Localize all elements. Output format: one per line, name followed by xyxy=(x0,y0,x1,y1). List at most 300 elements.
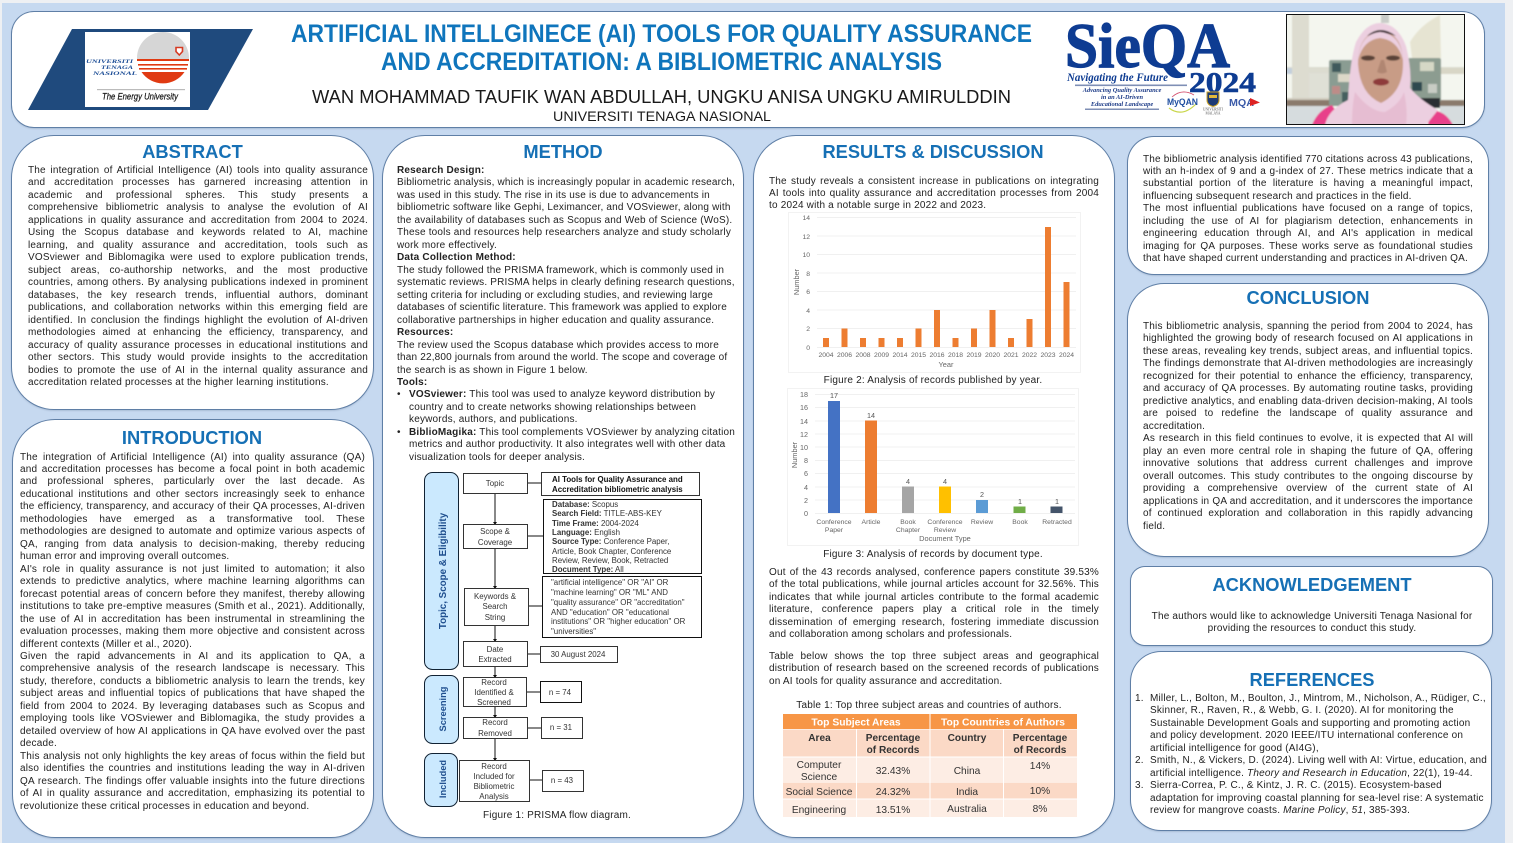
flow box labels: Date xyxy=(487,645,504,654)
flow box labels: Record xyxy=(481,762,507,771)
bar chart: records by document type: Review xyxy=(934,527,956,534)
bar chart: records by document type: 1 xyxy=(1018,497,1022,506)
flow box labels: Search xyxy=(482,602,508,611)
table: top subject areas and countries: 14% xyxy=(1030,761,1050,772)
conclusion text: are poised to redefine the landscape of quality assurance and xyxy=(1143,408,1473,419)
bar chart: records by year: 14 xyxy=(802,215,810,222)
stage label: screening: Screening xyxy=(438,686,448,731)
introduction text: comprehensive analysis of the research landscape is necessary. This xyxy=(20,663,365,674)
introduction text: and professional spheres, particularly over the last decade. As xyxy=(20,476,365,487)
bar chart: records by document type: Conference xyxy=(816,519,852,526)
flow box labels: Scope & xyxy=(480,527,511,536)
flow detail text: Accreditation bibliometric analysis xyxy=(552,485,683,494)
abstract text: comprehensive bibliometric analysis to analyse the evolution of AI xyxy=(28,202,368,213)
flow detail text: Source Type: Conference Paper, xyxy=(552,537,669,546)
bar chart: records by year: 2006 xyxy=(837,352,852,359)
method text: databases of scientific literature. This framework was applied to explore xyxy=(397,302,727,313)
bar chart: records by document type: Chapter xyxy=(896,527,921,534)
bar chart: records by document type: 14 xyxy=(867,411,875,420)
method text: These tools and resources help researchers analyze and study scholarly xyxy=(397,227,731,238)
table: top subject areas and countries xyxy=(783,714,1077,817)
method text: Resources: xyxy=(397,327,453,338)
results paragraph: table intro: distribution of research based on the screened records of publications xyxy=(769,663,1099,674)
reference list: adaptation for improving coastal planning for sea-level rise: A systematic xyxy=(1150,793,1484,804)
bar chart: records by document type: 4 xyxy=(906,477,910,486)
table: top subject areas and countries: 32.43% xyxy=(876,766,910,777)
flow box labels: 30 August 2024 xyxy=(551,650,606,659)
authors: UNIVERSITI TENAGA NASIONAL xyxy=(553,108,771,124)
panel: results and discussion xyxy=(754,136,1114,837)
method text: Data Collection Method: xyxy=(397,252,516,263)
flow detail text: Search Field: TITLE-ABS-KEY xyxy=(552,509,663,518)
method text: than 22,800 journals from around the world. The scope and coverage of xyxy=(397,352,727,363)
introduction text: QA, ranging from data analysis to decision-making, thereby reducing xyxy=(20,539,365,550)
abstract text: countries, among others. By analysing publications indexed in prominent xyxy=(28,277,368,288)
bar chart: records by year: 2022 xyxy=(1022,352,1037,359)
abstract text: publications, and collaboration networks within this emerging field are xyxy=(28,302,368,313)
key findings text xyxy=(1143,154,1473,264)
table: top subject areas and countries: 10% xyxy=(1030,786,1050,797)
bar chart: records by year: 0 xyxy=(806,345,810,352)
table: top subject areas and countries: Top Countries of Authors xyxy=(941,718,1065,728)
flow detail text: "artificial intelligence" OR "AI" OR xyxy=(551,578,669,587)
introduction text: different contexts (Miller et al., 2020). xyxy=(20,639,192,650)
conclusion text: of continued exploration and collaboration in this rapidly advancing xyxy=(1143,508,1473,519)
conclusion text: highlighted the growing body of research focused on AI applications in xyxy=(1143,333,1473,344)
introduction text: forecast potential areas of concern before they manifest, thereby allowing xyxy=(20,589,365,600)
method text: the search is as shown in Figure 1 below. xyxy=(397,364,588,376)
method text: Research Design: xyxy=(397,165,485,176)
university logo: The Energy University xyxy=(102,92,178,102)
conclusion text: innovative solutions that address current challenges and improve xyxy=(1143,458,1473,469)
introduction text: revolutionize these critical processes in education and beyond. xyxy=(20,801,309,812)
flow box labels: Analysis xyxy=(479,792,509,801)
figure 3 caption: Figure 3: Analysis of records by document type. xyxy=(823,549,1043,560)
conference logo: SieQA 2024: Advancing Quality Assurance xyxy=(1082,87,1161,94)
method text: • xyxy=(397,389,401,400)
results paragraph: document types xyxy=(769,567,1099,640)
introduction text: of AI in quality assurance and accreditation, emphasizing its potential to xyxy=(20,788,365,799)
introduction text: subject areas and influential topics of publications that have shaped the xyxy=(20,688,365,699)
abstract text: accuracy of quality assurance processes in educational institutions and xyxy=(28,340,368,351)
method text: metrics and author productivity. It also integrates well with other data xyxy=(409,439,725,450)
stage label: topic, scope and eligibility xyxy=(424,472,458,670)
table: top subject areas and countries: 24.32% xyxy=(876,787,910,798)
flow boxes xyxy=(460,472,702,802)
method text: BiblioMagika: This tool complements VOSviewer by analyzing citation xyxy=(409,427,735,438)
heading: introduction: INTRODUCTION xyxy=(122,427,262,448)
reference list: artificial intelligence. Theory and Research in Education, 22(1), 19-44. xyxy=(1150,768,1473,779)
results intro text: The study reveals a consistent increase in publications on integrating xyxy=(769,176,1099,186)
stage label: topic, scope and eligibility: Topic, Scope & Eligibility xyxy=(438,512,449,629)
bar chart: records by year: 2 xyxy=(806,326,810,333)
table: top subject areas and countries: Country xyxy=(948,733,987,744)
bar chart: records by year: 2015 xyxy=(911,352,926,359)
introduction text: extends to predictive analytics, where machine learning algorithms can xyxy=(20,576,365,587)
key findings text: engineering education through AI, and AI's application in medical xyxy=(1143,228,1473,239)
bar chart: records by year xyxy=(788,212,1081,373)
bar chart: records by year: 8 xyxy=(806,271,810,278)
table: top subject areas and countries: of Records xyxy=(867,745,920,756)
table: top subject areas and countries: 8% xyxy=(1033,804,1047,815)
abstract text: learning, and quality assurance and accreditation, tools such as xyxy=(28,240,368,251)
flow box labels: Keywords & xyxy=(474,592,517,601)
abstract text: identified. In conclusion the findings highlight the evolution of AI-driven xyxy=(28,315,368,326)
university logo: NASIONAL xyxy=(91,71,138,77)
flow detail text: Document Type: All xyxy=(552,565,624,574)
bar chart: records by document type: 1 xyxy=(1055,497,1059,506)
bar chart: records by document type: Book xyxy=(900,519,916,526)
flow box labels: Screened xyxy=(477,698,511,707)
abstract text: applications in quality assurance and accreditation from 2004 to 2024. xyxy=(28,215,368,226)
bar chart: records by year: 10 xyxy=(802,252,810,259)
results paragraph: document types: dissemination of emerging research, fostering immediate discussion xyxy=(769,617,1099,628)
reference list xyxy=(1135,693,1487,816)
method text: visualization tools for deeper analysis. xyxy=(409,452,585,463)
table: top subject areas and countries: 13.51% xyxy=(876,805,910,816)
results intro text: AI tools into quality assurance and accreditation processes from 2004 xyxy=(769,188,1099,199)
table: top subject areas and countries: Social Science xyxy=(786,787,853,798)
method text: was used in this study. The rise in its use is due to advancements in xyxy=(397,190,710,201)
bar chart: records by document type: 2 xyxy=(804,496,808,505)
table: top subject areas and countries: Area xyxy=(808,733,831,744)
flow detail text: "universities" xyxy=(551,627,596,636)
figure 2 caption: Figure 2: Analysis of records published by year. xyxy=(824,375,1042,386)
abstract text: VOSviewer and Biblomagika were used to explore publication trends, xyxy=(28,252,368,263)
conference logo: SieQA 2024: MALAYA xyxy=(1205,112,1221,116)
bar chart: records by document type: 10 xyxy=(800,443,808,452)
authors: WAN MOHAMMAD TAUFIK WAN ABDULLAH, UNGKU ANISA UNGKU AMIRULDDIN xyxy=(312,87,1011,107)
flow box labels xyxy=(473,479,606,801)
conclusion text: field. xyxy=(1143,520,1165,532)
panel: references xyxy=(1131,652,1491,830)
flow box labels: Topic xyxy=(486,479,504,488)
abstract text: databases, the key research trends, influential authors, dominant xyxy=(28,290,368,301)
method text: the availability of databases such as Scopus and Web of Science (WoS). xyxy=(397,215,732,226)
key findings text: The most influential publications have focused on a range of topics, xyxy=(1143,203,1473,214)
introduction text: evaluation processes, making them more objective and consistent across xyxy=(20,626,365,637)
bar chart: records by year: 2023 xyxy=(1040,352,1056,359)
flow box labels: Bibliometric xyxy=(474,782,514,791)
flow box labels: Coverage xyxy=(478,538,513,547)
method text: Bibliometric analysis, which is increasingly popular in academic research, xyxy=(397,177,735,188)
authors xyxy=(312,87,1011,124)
bar chart: records by year: 2018 xyxy=(948,352,963,359)
introduction text: QA research. The findings offer valuable insights into the future directions xyxy=(20,776,365,787)
results paragraph: document types: and collaboration among scholars and professionals. xyxy=(769,629,1012,640)
reference list: 3. xyxy=(1135,780,1144,791)
bar chart: records by document type: Conference xyxy=(927,519,963,526)
bar chart: records by document type: Book xyxy=(1012,519,1028,526)
heading: acknowledgement: ACKNOWLEDGEMENT xyxy=(1212,574,1412,595)
bar chart: records by year: 2009 xyxy=(874,352,889,359)
flow box labels: n = 31 xyxy=(550,723,572,732)
conclusion text: The findings demonstrate that AI-driven methodologies are increasingly xyxy=(1143,358,1473,369)
conclusion text xyxy=(1143,321,1473,532)
conclusion text: predictive analytics, and enabling data-driven decision-making, AI tools xyxy=(1143,396,1473,407)
reference list: Skinner, R., Raven, R., & Webb, G. I. (2020). AI for monitoring the xyxy=(1150,705,1454,716)
bar chart: records by document type: 18 xyxy=(800,390,808,399)
bar chart: records by document type: 16 xyxy=(800,403,808,412)
conclusion text: accreditation. xyxy=(1143,421,1205,432)
conclusion text: play an even more central role in shaping the future of QA, offering xyxy=(1143,446,1473,457)
flow box labels: Extracted xyxy=(478,655,512,664)
abstract text: academic and professional spheres. This study presents a xyxy=(28,190,368,201)
method text: The review used the Scopus database which provides access to more xyxy=(397,340,719,351)
flow detail text: AND "education" OR "educational xyxy=(551,608,669,617)
flow detail text: "machine learning" OR "ML" AND xyxy=(551,588,668,597)
reference list: review for mangrove coasts. Marine Policy, 51, 385-393. xyxy=(1150,805,1410,816)
bar chart: records by year: 2020 xyxy=(985,352,1000,359)
reference list: Sustainable Development Goals and supporting and promoting action xyxy=(1150,718,1470,729)
university logo: TENAGA xyxy=(101,65,133,71)
method text: country and to create networks showing relationships between xyxy=(409,402,696,413)
university logo xyxy=(28,29,253,110)
abstract text: subject areas, co-authorship networks, and the most productive xyxy=(28,265,368,276)
flow box labels: n = 43 xyxy=(551,776,574,785)
results paragraph: document types: literature, conference papers play a critical role in the timely xyxy=(769,604,1099,615)
key findings text: imaging for QA purposes. These works serve as foundational studies xyxy=(1143,241,1473,252)
introduction text xyxy=(20,452,365,812)
flow detail text: Language: English xyxy=(552,528,620,537)
results paragraph: document types: of the total publications, while journal articles account for 32.56%. This xyxy=(769,579,1099,590)
flow detail text: "quality assurance" OR "accreditation" xyxy=(551,598,685,607)
method text: setting criteria for including or excluding studies, and reviewing large xyxy=(397,290,713,301)
introduction text: field from 2004 to 2024. By leveraging databases such as Scopus and xyxy=(20,701,365,712)
reference list: Smith, N., & Vickers, D. (2024). Living well with AI: Virtue, education, and xyxy=(1150,755,1487,766)
stage label: screening xyxy=(424,676,458,744)
conference logo: SieQA 2024: Navigating the Future xyxy=(1066,72,1168,84)
results paragraph: table intro: Table below shows the top three subject areas and geographical xyxy=(769,651,1099,662)
flow detail text: AI Tools for Quality Assurance and xyxy=(552,475,683,484)
introduction text: institutions to take pre-emptive measures (Smith et al., 2021). Additionally, xyxy=(20,601,365,612)
bar chart: records by year: 2004 xyxy=(818,352,834,359)
introduction text: methodologies are designed to automate and optimize various aspects of xyxy=(20,526,365,537)
introduction text: Given the rapid advancements in AI and its application to QA, a xyxy=(20,651,365,662)
abstract text: methodologies aimed at enhancing the efficiency, transparency, and xyxy=(28,327,368,338)
bar chart: records by document type: 14 xyxy=(800,417,808,426)
introduction text: methodologies have emerged as a transformative tool. These xyxy=(20,514,365,525)
bar chart: records by year: 12 xyxy=(802,234,810,241)
method text: bibliometric software like Gephi, Leximancer, and VOSviewer, along with xyxy=(397,202,731,213)
reference list: artificial intelligence for good (AI4G), xyxy=(1150,743,1319,754)
acknowledgement text: The authors would like to acknowledge Universiti Tenaga Nasional for xyxy=(1152,611,1472,622)
introduction text: educational institutions and other sectors increasingly seek to enhance xyxy=(20,489,365,500)
results paragraph: document types: indicates that while journal articles contribute to the formal academic xyxy=(769,592,1099,603)
bar chart: records by document type: Number xyxy=(790,441,799,468)
bar chart: records by document type: Paper xyxy=(825,527,844,534)
results intro text xyxy=(769,176,1099,211)
bar chart: records by year: 4 xyxy=(806,308,810,315)
reference list: 1. xyxy=(1135,693,1144,704)
abstract text: Using the Scopus database and keywords related to AI, machine xyxy=(28,227,368,238)
conclusion text: This bibliometric analysis, spanning the period from 2004 to 2024, has xyxy=(1143,321,1473,332)
flow detail text: Article, Book Chapter, Conference xyxy=(552,547,672,556)
panel: abstract xyxy=(12,136,373,409)
abstract text xyxy=(28,165,368,388)
reference list: 2. xyxy=(1135,755,1144,766)
method text: The study followed the PRISMA framework, which is commonly used in xyxy=(397,265,724,276)
conclusion text: applications in QA and accreditation, and it underscores the importance xyxy=(1143,496,1473,507)
bar chart: records by year: 6 xyxy=(806,289,810,296)
key findings text: with an h-index of 9 and a g-index of 27. These metrics indicate that a xyxy=(1143,166,1473,177)
table: top subject areas and countries: Science xyxy=(801,772,837,783)
bar chart: records by year: Number xyxy=(792,268,801,295)
reference list: Sierra-Correa, P. C., & Kintz, J. R. C. (2015). Ecosystem-based xyxy=(1150,780,1442,791)
introduction text: This analysis not only highlights the key areas of focus within the field but xyxy=(20,751,365,762)
conference logo: SieQA 2024: 2024 xyxy=(1189,67,1256,99)
introduction text: also identifies the countries and institutions leading the way in AI-driven xyxy=(20,763,365,774)
conference logo: SieQA 2024: UNIVERSITI xyxy=(1203,108,1224,112)
flow detail text xyxy=(551,475,686,636)
flow box labels: String xyxy=(485,613,505,622)
heading: results and discussion: RESULTS & DISCUSSION xyxy=(822,141,1044,162)
bar chart: records by year: 2008 xyxy=(855,352,871,359)
bar chart: records by year: 2016 xyxy=(929,352,945,359)
heading: method: METHOD xyxy=(523,141,603,162)
introduction text: study, therefore, conducts a bibliometric analysis to learn the trends, key xyxy=(20,676,365,687)
bar chart: records by document type: 4 xyxy=(943,477,947,486)
bar chart: records by document type: Document Type xyxy=(919,534,971,543)
panel: key findings xyxy=(1128,137,1488,274)
flow box labels: Removed xyxy=(478,729,512,738)
introduction text: The integration of Artificial Intelligence (AI) into quality assurance (QA) xyxy=(20,452,365,462)
abstract text: bodies to promote the use of AI in the internal quality assurance and xyxy=(28,364,368,376)
flow detail text: Time Frame: 2004-2024 xyxy=(552,519,639,528)
abstract text: and accreditation processes has garnered increasing attention in xyxy=(28,177,368,188)
acknowledgement text: providing the resources to conduct this study. xyxy=(1208,623,1416,634)
conference logo: SieQA 2024: MQA xyxy=(1229,97,1254,109)
bar chart: records by document type: 12 xyxy=(800,430,808,439)
heading: references: REFERENCES xyxy=(1250,669,1374,690)
table: top subject areas and countries: Australia xyxy=(947,804,987,815)
introduction text: human error and improving overall outcomes. xyxy=(20,551,229,562)
abstract text: The integration of Artificial Intelligence (AI) tools into quality assurance xyxy=(28,165,368,176)
conclusion text: providing a comprehensive overview of the current state of AI xyxy=(1143,483,1473,494)
flow box labels: Identified & xyxy=(474,688,514,697)
table: top subject areas and countries: Top Subject Areas xyxy=(811,718,901,728)
bar chart: records by year: Year xyxy=(939,360,954,369)
heading: abstract: ABSTRACT xyxy=(142,141,243,162)
results paragraph: table intro: on AI tools for quality assurance and accreditation. xyxy=(769,676,1002,687)
acknowledgement text xyxy=(1152,611,1472,634)
table: top subject areas and countries: Percentage xyxy=(1013,733,1068,744)
introduction text: decade. xyxy=(20,738,57,749)
bar chart: records by document type: 4 xyxy=(804,483,808,492)
conclusion text: recognized for their potential to enhance the efficiency, transparency, xyxy=(1143,371,1473,382)
flow detail text: Database: Scopus xyxy=(552,500,618,509)
abstract text: accreditation related processes at the higher learning institutions. xyxy=(28,377,329,388)
introduction text: the use of AI in accreditation has been instrumental in streamlining the xyxy=(20,614,365,625)
table: top subject areas and countries: China xyxy=(954,766,981,777)
university logo: UNIVERSITI xyxy=(86,59,134,65)
bar chart: records by year: 2014 xyxy=(892,352,908,359)
bar chart: records by year: 2019 xyxy=(966,352,982,359)
key findings text: including the use of AI for plagiarism detection, enhancements in xyxy=(1143,216,1473,227)
bar chart: records by document type: 6 xyxy=(804,469,808,478)
stage label: included xyxy=(424,754,458,806)
introduction text: employing tools like VOSviewer and Biblomagika, the study provides a xyxy=(20,713,365,724)
bar chart: records by document type: Retracted xyxy=(1042,519,1072,526)
figure 1 caption: Figure 1: PRISMA flow diagram. xyxy=(483,810,631,821)
stage label: included: Included xyxy=(438,760,448,798)
flow box labels: Included for xyxy=(473,772,515,781)
flow box labels: Record xyxy=(482,718,508,727)
bar chart: records by document type xyxy=(787,388,1079,546)
flow detail text: Review, Review, Book, Retracted xyxy=(552,556,668,565)
bar chart: records by document type: 0 xyxy=(804,509,808,518)
PRISMA flow diagram xyxy=(424,472,702,807)
conference logo: SieQA 2024: MyQAN xyxy=(1167,97,1198,107)
flow box labels: n = 74 xyxy=(549,688,572,697)
introduction text: the efficiency, transparency, and accuracy of their QA processes, AI-driven xyxy=(20,501,365,512)
key findings text: substantial portion of the literature is having a meaningful impact, xyxy=(1143,178,1473,189)
method text: work more effectively. xyxy=(397,240,497,251)
conference logo: SieQA 2024: Educational Landscape xyxy=(1090,101,1153,108)
method text xyxy=(397,165,735,463)
bar chart: records by year: 2024 xyxy=(1059,352,1074,359)
table: top subject areas and countries: Percentage xyxy=(866,733,921,744)
method text: systematic reviews. PRISMA helps in clearly defining research questions, xyxy=(397,277,735,288)
method text: • xyxy=(397,427,401,438)
panel: method xyxy=(383,136,743,837)
panel: introduction xyxy=(13,420,373,837)
panel: conclusion xyxy=(1128,284,1488,556)
conference logo: SieQA 2024 xyxy=(1065,11,1260,116)
conclusion text: and accuracy of QA processes. By automating routine tasks, providing xyxy=(1143,383,1473,394)
table: top subject areas and countries: Engineering xyxy=(792,805,847,816)
table: top subject areas and countries: Computer xyxy=(797,760,842,771)
conference logo: SieQA 2024: SieQA xyxy=(1065,11,1230,81)
reference list: and policy development. 2020 IEEE/ITU international conference on xyxy=(1150,730,1463,741)
conference logo: SieQA 2024: in an AI-Driven xyxy=(1101,94,1143,101)
introduction text: detailed overview of how AI applications in QA have evolved over the past xyxy=(20,726,365,737)
conclusion text: these areas, revealing key trends, subject areas, and influential topics. xyxy=(1143,346,1473,357)
bar chart: records by document type: 8 xyxy=(804,456,808,465)
bar chart: records by year: 2021 xyxy=(1003,352,1019,359)
table 1 caption: Table 1: Top three subject areas and countries of authors. xyxy=(796,700,1062,711)
panel: acknowledgement xyxy=(1131,567,1492,645)
key findings text: that have shaped current understanding and practices in AI-driven QA. xyxy=(1143,253,1468,264)
key findings text: The bibliometric analysis identified 770 citations across 43 publications, xyxy=(1143,154,1473,164)
results paragraph: document types: Out of the 43 records analysed, conference papers constitute 39.53% xyxy=(769,567,1099,578)
flow box labels: Record xyxy=(481,678,507,687)
poster title xyxy=(291,20,1032,76)
conclusion text: As research in this field continues to evolve, it is expected that AI will xyxy=(1143,433,1473,444)
header banner xyxy=(12,12,1484,127)
introduction text: AI's role in quality assurance is not just limited to automation; it also xyxy=(20,564,365,575)
conclusion text: overall outcomes. This study contributes to the ongoing discourse by xyxy=(1143,471,1473,482)
heading: conclusion: CONCLUSION xyxy=(1247,287,1369,308)
results intro text: to 2024 with a notable surge in 2022 and 2023. xyxy=(769,200,986,211)
method text: VOSviewer: This tool was used to analyze keyword distribution by xyxy=(409,389,715,400)
table: top subject areas and countries: India xyxy=(956,787,978,798)
abstract text: other sectors. This study would provide insights to the accreditation xyxy=(28,352,368,363)
method text: keywords, authors, and publications. xyxy=(409,414,578,425)
flow detail text: institutions" OR "higher education" OR xyxy=(551,617,686,626)
results paragraph: table intro xyxy=(769,651,1099,687)
bar chart: records by document type: 17 xyxy=(830,391,838,400)
poster title: AND ACCREDITATION: A BIBLIOMETRIC ANALYSIS xyxy=(381,48,942,76)
reference list: Miller, L., Bolton, M., Boulton, J., Mintrom, M., Nicholson, A., Rüdiger, C., xyxy=(1150,693,1486,704)
method text: collaborative partnerships in higher education and quality assurance. xyxy=(397,315,714,326)
bar chart: records by document type: Review xyxy=(971,519,993,526)
introduction text: and accreditation processes has become a focal point in both academic xyxy=(20,464,365,475)
presenter photo xyxy=(1286,14,1465,125)
key findings text: influencing subsequent research and practices in the field. xyxy=(1143,191,1412,202)
method text: Tools: xyxy=(397,377,427,388)
bar chart: records by document type: Article xyxy=(862,519,881,526)
